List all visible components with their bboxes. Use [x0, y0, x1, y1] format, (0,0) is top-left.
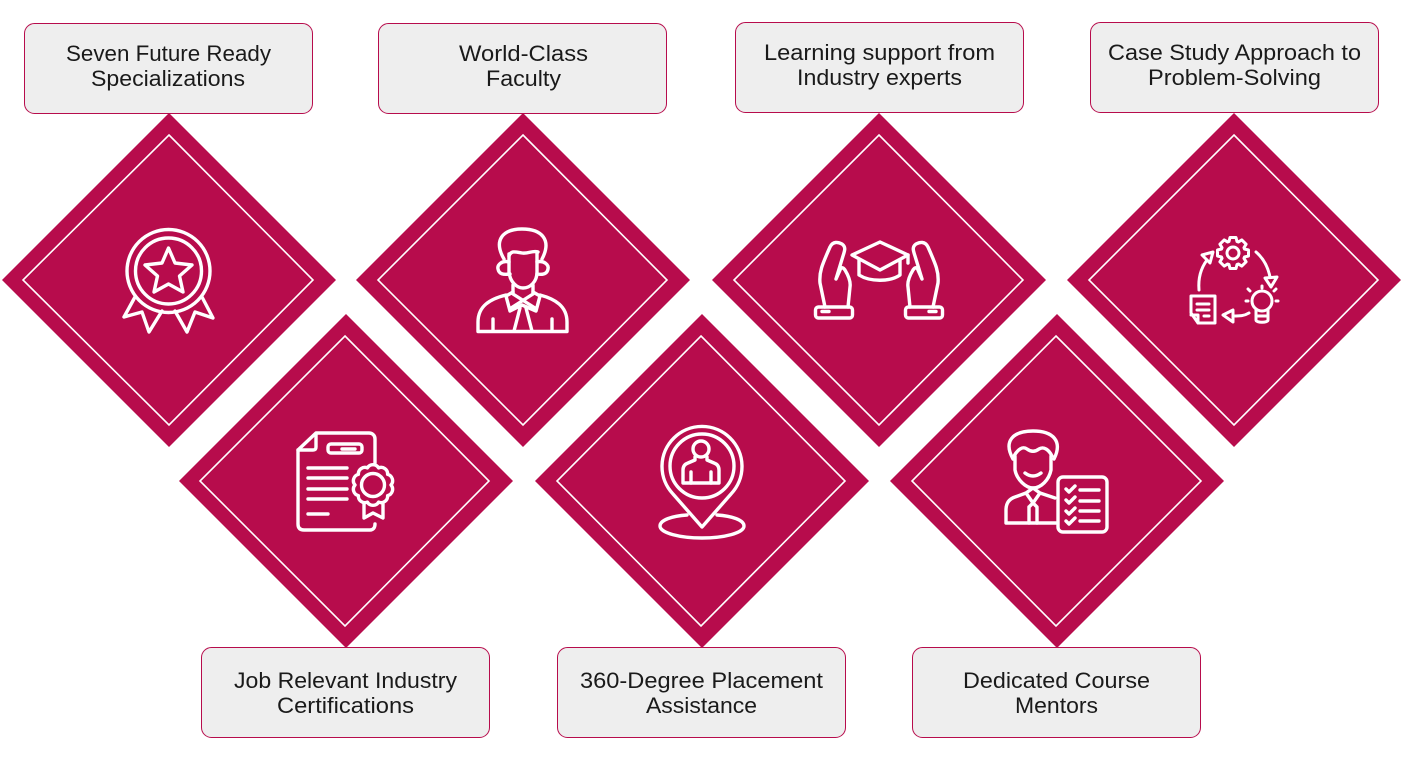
- card: Case Study Approach to Problem-Solving: [1090, 22, 1378, 112]
- card: Dedicated Course Mentors: [912, 648, 1200, 738]
- card: Case Study Approach to Problem-Solving: Problem-Solving: [1148, 65, 1321, 90]
- card: 360-Degree Placement Assistance: [558, 648, 846, 738]
- icon: course mentor with checklist: [1006, 431, 1107, 532]
- card: Job Relevant Industry Certifications: Certifications: [277, 693, 414, 718]
- card: Seven Future Ready Specializations: Specializations: [91, 66, 245, 91]
- diamond: placement: [535, 314, 869, 648]
- card: World-Class Faculty: World-Class: [459, 41, 588, 66]
- diamond: faculty: [356, 113, 690, 447]
- card: 360-Degree Placement Assistance: 360-Degree Placement: [580, 668, 823, 693]
- card: Learning support from Industry experts: [736, 22, 1024, 112]
- icon: hands holding graduation cap: [816, 242, 942, 318]
- diamond: certifications: [179, 314, 513, 648]
- card: Dedicated Course Mentors: Mentors: [1015, 693, 1098, 718]
- card: Dedicated Course Mentors: Dedicated Course: [963, 668, 1150, 693]
- right hand: [906, 242, 942, 318]
- card: World-Class Faculty: [378, 24, 666, 114]
- icon: placement location pin: [660, 426, 744, 538]
- card: Case Study Approach to Problem-Solving: Case Study Approach to: [1108, 40, 1361, 65]
- card: Job Relevant Industry Certifications: [202, 648, 490, 738]
- icon: problem solving cycle: [1191, 238, 1278, 323]
- icon: certificate with seal: [298, 433, 393, 530]
- card: Job Relevant Industry Certifications: Job Relevant Industry: [234, 668, 457, 693]
- diamond: specializations: [2, 113, 336, 447]
- icon: award rosette: [124, 230, 213, 332]
- diamond: industry experts: [712, 113, 1046, 447]
- card: Seven Future Ready Specializations: [24, 24, 312, 114]
- card: 360-Degree Placement Assistance: Assistance: [646, 693, 757, 718]
- diamond: mentors: [890, 314, 1224, 648]
- card: Seven Future Ready Specializations: Seven Future Ready: [66, 41, 271, 66]
- icon: faculty person: [478, 229, 567, 332]
- card: Learning support from Industry experts: Industry experts: [797, 65, 962, 90]
- left hand: [816, 242, 852, 318]
- card: Learning support from Industry experts: Learning support from: [764, 40, 995, 65]
- card: World-Class Faculty: Faculty: [486, 66, 561, 91]
- diamond: case study: [1067, 113, 1401, 447]
